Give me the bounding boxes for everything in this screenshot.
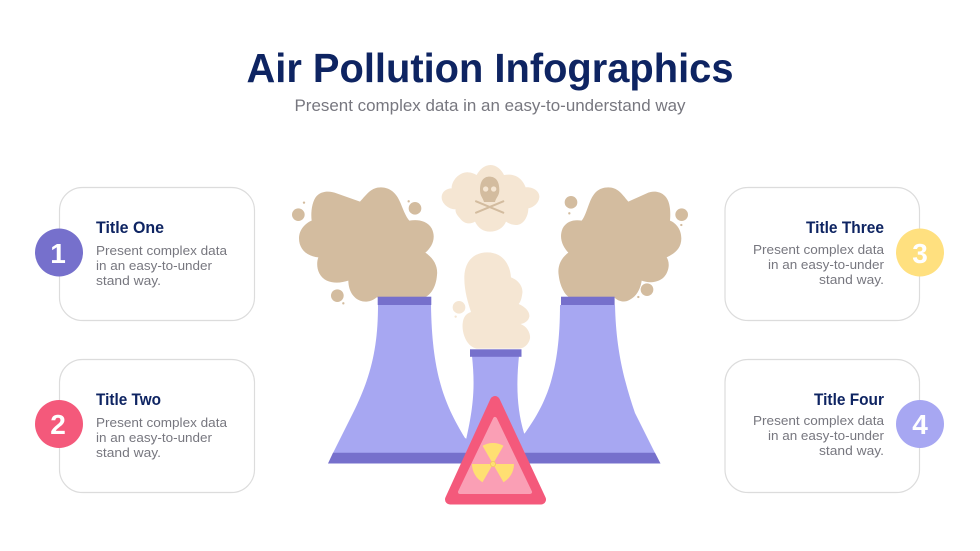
panel: title one [35, 188, 254, 320]
text block: title one: stand way. [96, 273, 161, 288]
icon: radiation symbol [472, 443, 514, 482]
text block: title four: in an easy-to-under [768, 428, 885, 443]
badge 2 [35, 400, 83, 448]
text block: title two: stand way. [96, 445, 161, 460]
text block: title one [96, 243, 228, 288]
text block: title three: in an easy-to-under [768, 257, 885, 272]
subtitle: Present complex data in an easy-to-understand way [294, 96, 686, 115]
icon: right smoke [558, 187, 688, 301]
panel: title three [725, 188, 944, 320]
text block: title one: Present complex data [96, 243, 228, 258]
tower base band [328, 453, 660, 464]
illustration: cooling towers [328, 297, 660, 464]
badge 3 [896, 228, 944, 276]
text block: title three [753, 242, 885, 287]
text block: title four [753, 413, 885, 458]
title: Air Pollution Infographics [246, 45, 734, 91]
icon: left smoke [292, 187, 437, 304]
badge 3: 3 [912, 238, 928, 269]
icon: radiation warning triangle [450, 401, 541, 500]
text block: title three: Present complex data [753, 242, 885, 257]
icon: centre smoke [453, 252, 530, 349]
right tower [495, 297, 655, 453]
text block: title two: Present complex data [96, 415, 228, 430]
text block: title four: stand way. [819, 443, 884, 458]
panel: title four [725, 360, 944, 492]
heading: title four: Title Four [814, 391, 885, 409]
centre tower [465, 349, 526, 455]
text block: title two [96, 415, 228, 460]
text block: title two: in an easy-to-under [96, 430, 213, 445]
icon: skull cloud [442, 165, 539, 232]
panel: title two [35, 360, 254, 492]
heading: title one: Title One [96, 219, 164, 237]
heading: title two: Title Two [96, 391, 161, 409]
heading: title three: Title Three [806, 219, 884, 237]
illustration: smoke clouds [292, 165, 688, 349]
badge 4 [896, 400, 944, 448]
text block: title three: stand way. [819, 272, 884, 287]
badge 2: 2 [50, 409, 66, 440]
badge 4: 4 [912, 409, 928, 440]
badge 1 [35, 228, 83, 276]
text block: title one: in an easy-to-under [96, 258, 213, 273]
badge 1: 1 [50, 238, 66, 269]
text block: title four: Present complex data [753, 413, 885, 428]
left tower [333, 297, 495, 453]
